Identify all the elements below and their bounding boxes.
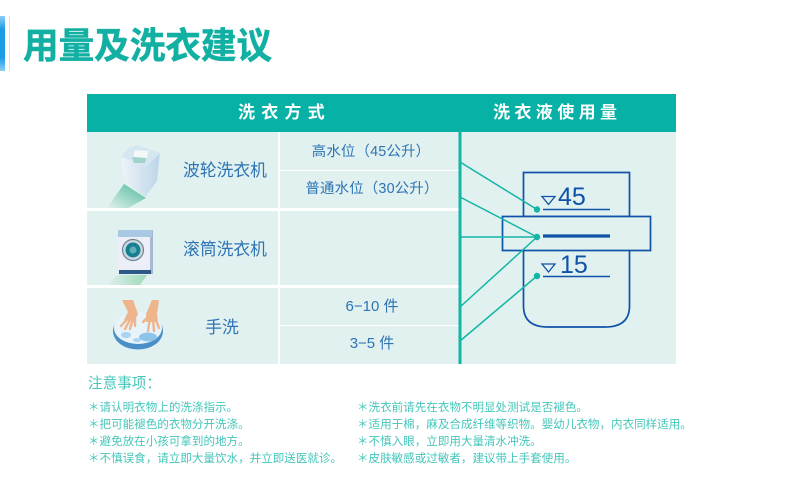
label: 3-5 items: 3−5 件 xyxy=(350,335,394,352)
label: drum washer: 滚筒洗衣机 xyxy=(183,240,267,259)
label: hand wash: 手洗 xyxy=(205,318,239,337)
cell: 3-5 items xyxy=(280,326,460,364)
cell: high water level xyxy=(280,132,460,170)
table header: detergent dosage xyxy=(460,94,676,132)
table header: detergent dosage: 洗衣液使用量 xyxy=(493,103,621,122)
table xyxy=(87,94,676,364)
notes heading: 注意事项： xyxy=(88,376,161,392)
notes left column: ＊不慎误食，请立即大量饮水，并立即送医就诊。 xyxy=(88,453,342,465)
label: pulsator washer: 波轮洗衣机 xyxy=(183,161,267,180)
connector lines xyxy=(460,132,537,364)
connector dots xyxy=(534,206,540,279)
notes left column: ＊请认明衣物上的洗涤指示。 xyxy=(88,402,238,414)
label: high water level: 高水位（45公升） xyxy=(312,144,430,160)
title: 用量及洗衣建议 xyxy=(23,26,272,66)
icon: front-load washing machine xyxy=(111,230,153,285)
dosage panel xyxy=(460,132,676,364)
title accent bar xyxy=(0,16,10,71)
cell: drum empty xyxy=(280,211,460,285)
level 45: 45 xyxy=(558,183,586,211)
level 15: 15 xyxy=(560,251,588,279)
row: pulsator washer xyxy=(87,132,278,208)
dosage diagram xyxy=(458,132,652,364)
notes right column: ＊适用于棉，麻及合成纤维等织物。婴幼儿衣物，内衣同样适用。 xyxy=(357,419,692,431)
icon: top-load washing machine xyxy=(109,145,160,208)
cell: normal water level xyxy=(280,171,460,208)
label: 6-10 items: 6−10 件 xyxy=(346,298,398,315)
cell: 6-10 items xyxy=(280,288,460,325)
bottle outline xyxy=(502,172,650,327)
notes right column xyxy=(357,401,692,465)
notes left column: ＊避免放在小孩可拿到的地方。 xyxy=(88,436,250,448)
table header: washing method: 洗衣方式 xyxy=(238,103,331,122)
level triangles xyxy=(542,196,555,272)
notes left column: ＊把可能褪色的衣物分开洗涤。 xyxy=(88,419,250,431)
notes left column xyxy=(88,401,342,465)
icon: hands washing in basin xyxy=(113,300,163,350)
table header: washing method xyxy=(87,94,460,132)
notes right column: ＊皮肤敏感或过敏者，建议带上手套使用。 xyxy=(357,453,576,465)
notes right column: ＊洗衣前请先在衣物不明显处测试是否褪色。 xyxy=(357,402,588,414)
notes right column: ＊不慎入眼，立即用大量清水冲洗。 xyxy=(357,436,542,448)
label: normal water level: 普通水位（30公升） xyxy=(305,181,439,197)
level marks xyxy=(543,210,610,276)
row: drum washer xyxy=(87,211,278,285)
row: hand wash xyxy=(87,288,278,364)
